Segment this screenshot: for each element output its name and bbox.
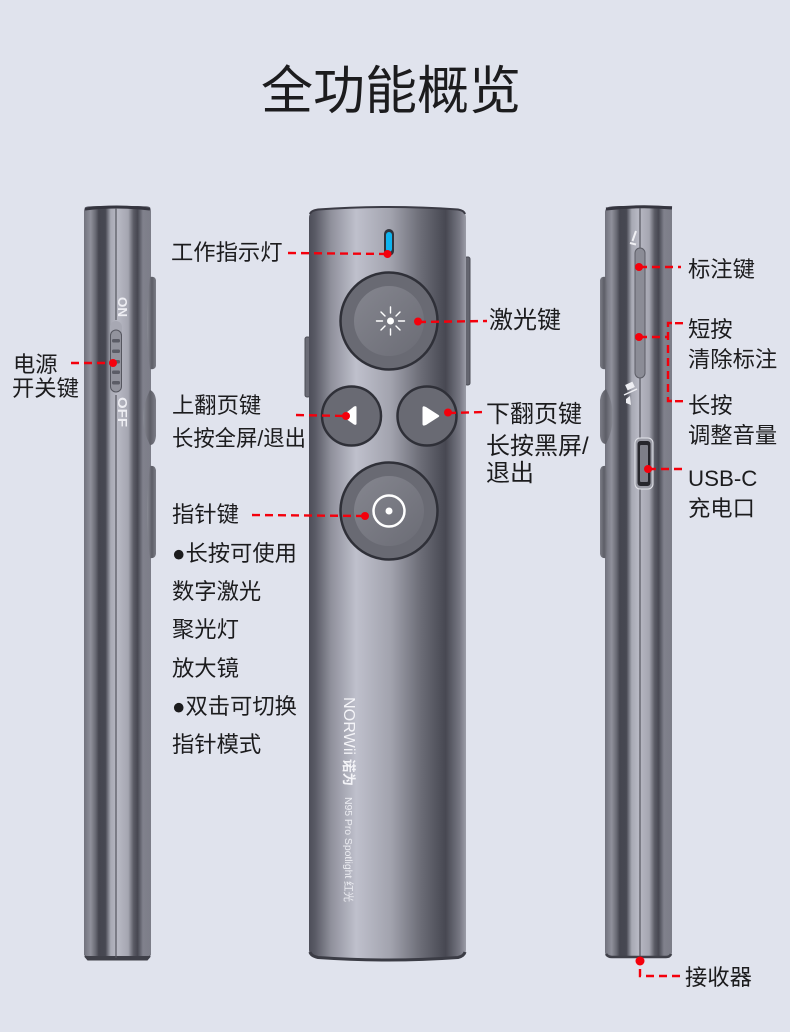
title: 全功能概览 — [261, 63, 521, 121]
brand name: 诺为 — [341, 759, 357, 786]
side strips — [305, 337, 310, 397]
body — [309, 206, 466, 960]
device: front view — [305, 206, 470, 960]
callout: clear annotation and volume: 清除标注 — [688, 347, 777, 372]
model name: N95 Pro Spotlight 红光 — [342, 797, 355, 902]
callout: laser key: 激光键 — [489, 307, 561, 334]
status light — [384, 229, 394, 256]
body — [605, 206, 672, 958]
brand name: NORWii — [340, 697, 357, 755]
pointer key details: 指针模式 — [172, 732, 261, 757]
pointer key details — [172, 541, 297, 757]
ON label: ON — [115, 297, 129, 317]
callout: next page: 下翻页键 — [486, 401, 582, 428]
callout: power switch: 开关键 — [12, 376, 79, 401]
power switch — [110, 321, 122, 392]
callout: working light: 工作指示灯 — [171, 240, 282, 265]
callout: USB-C port — [644, 465, 757, 521]
icon: target — [374, 496, 404, 526]
icon: laser sun — [376, 307, 404, 335]
callout: pointer key: 指针键 — [172, 502, 239, 527]
callout: annotation key: 标注键 — [688, 257, 755, 282]
callout: USB-C port: USB-C — [688, 466, 757, 491]
next page button — [398, 386, 456, 446]
callout: working light — [171, 240, 392, 265]
callout: next page: 长按黑屏/ — [486, 433, 589, 460]
OFF label: OFF — [115, 397, 129, 427]
icon: volume — [624, 382, 637, 405]
body — [84, 206, 151, 960]
device: right side view — [600, 206, 672, 958]
USB-C port — [635, 438, 653, 489]
device: left side view — [84, 206, 156, 960]
callout: previous page: 长按全屏/退出 — [172, 426, 306, 451]
side buttons — [600, 277, 613, 558]
callout: next page — [444, 401, 589, 487]
pointer button — [340, 462, 438, 560]
brand name — [340, 697, 357, 786]
callout: power switch — [12, 352, 117, 401]
pointer key details: 放大镜 — [172, 656, 239, 681]
callout: receiver: 接收器 — [685, 965, 752, 990]
annotation button — [635, 248, 645, 378]
callout: previous page: 上翻页键 — [172, 393, 261, 418]
previous page button — [322, 386, 381, 446]
pointer key details: ●双击可切换 — [172, 694, 297, 719]
callout: laser key — [414, 307, 561, 334]
callout: clear annotation and volume: 调整音量 — [688, 423, 777, 448]
callout: pointer key — [172, 502, 369, 757]
callout: power switch: 电源 — [13, 352, 58, 377]
pointer key details: 数字激光 — [172, 579, 261, 604]
callout: USB-C port: 充电口 — [688, 496, 755, 521]
callout: clear annotation and volume: 短按 — [688, 317, 733, 342]
laser button — [340, 272, 438, 370]
callout: annotation key — [635, 257, 755, 282]
callout: next page: 退出 — [486, 460, 534, 487]
pointer key details: 聚光灯 — [172, 617, 239, 642]
callout: clear annotation and volume: 长按 — [688, 393, 733, 418]
icon: pen — [630, 231, 636, 244]
callout: receiver — [636, 956, 752, 990]
side buttons — [143, 277, 156, 558]
pointer key details: ●长按可使用 — [172, 541, 297, 566]
callout: previous page — [172, 393, 350, 451]
callout: clear annotation and volume — [635, 317, 777, 448]
